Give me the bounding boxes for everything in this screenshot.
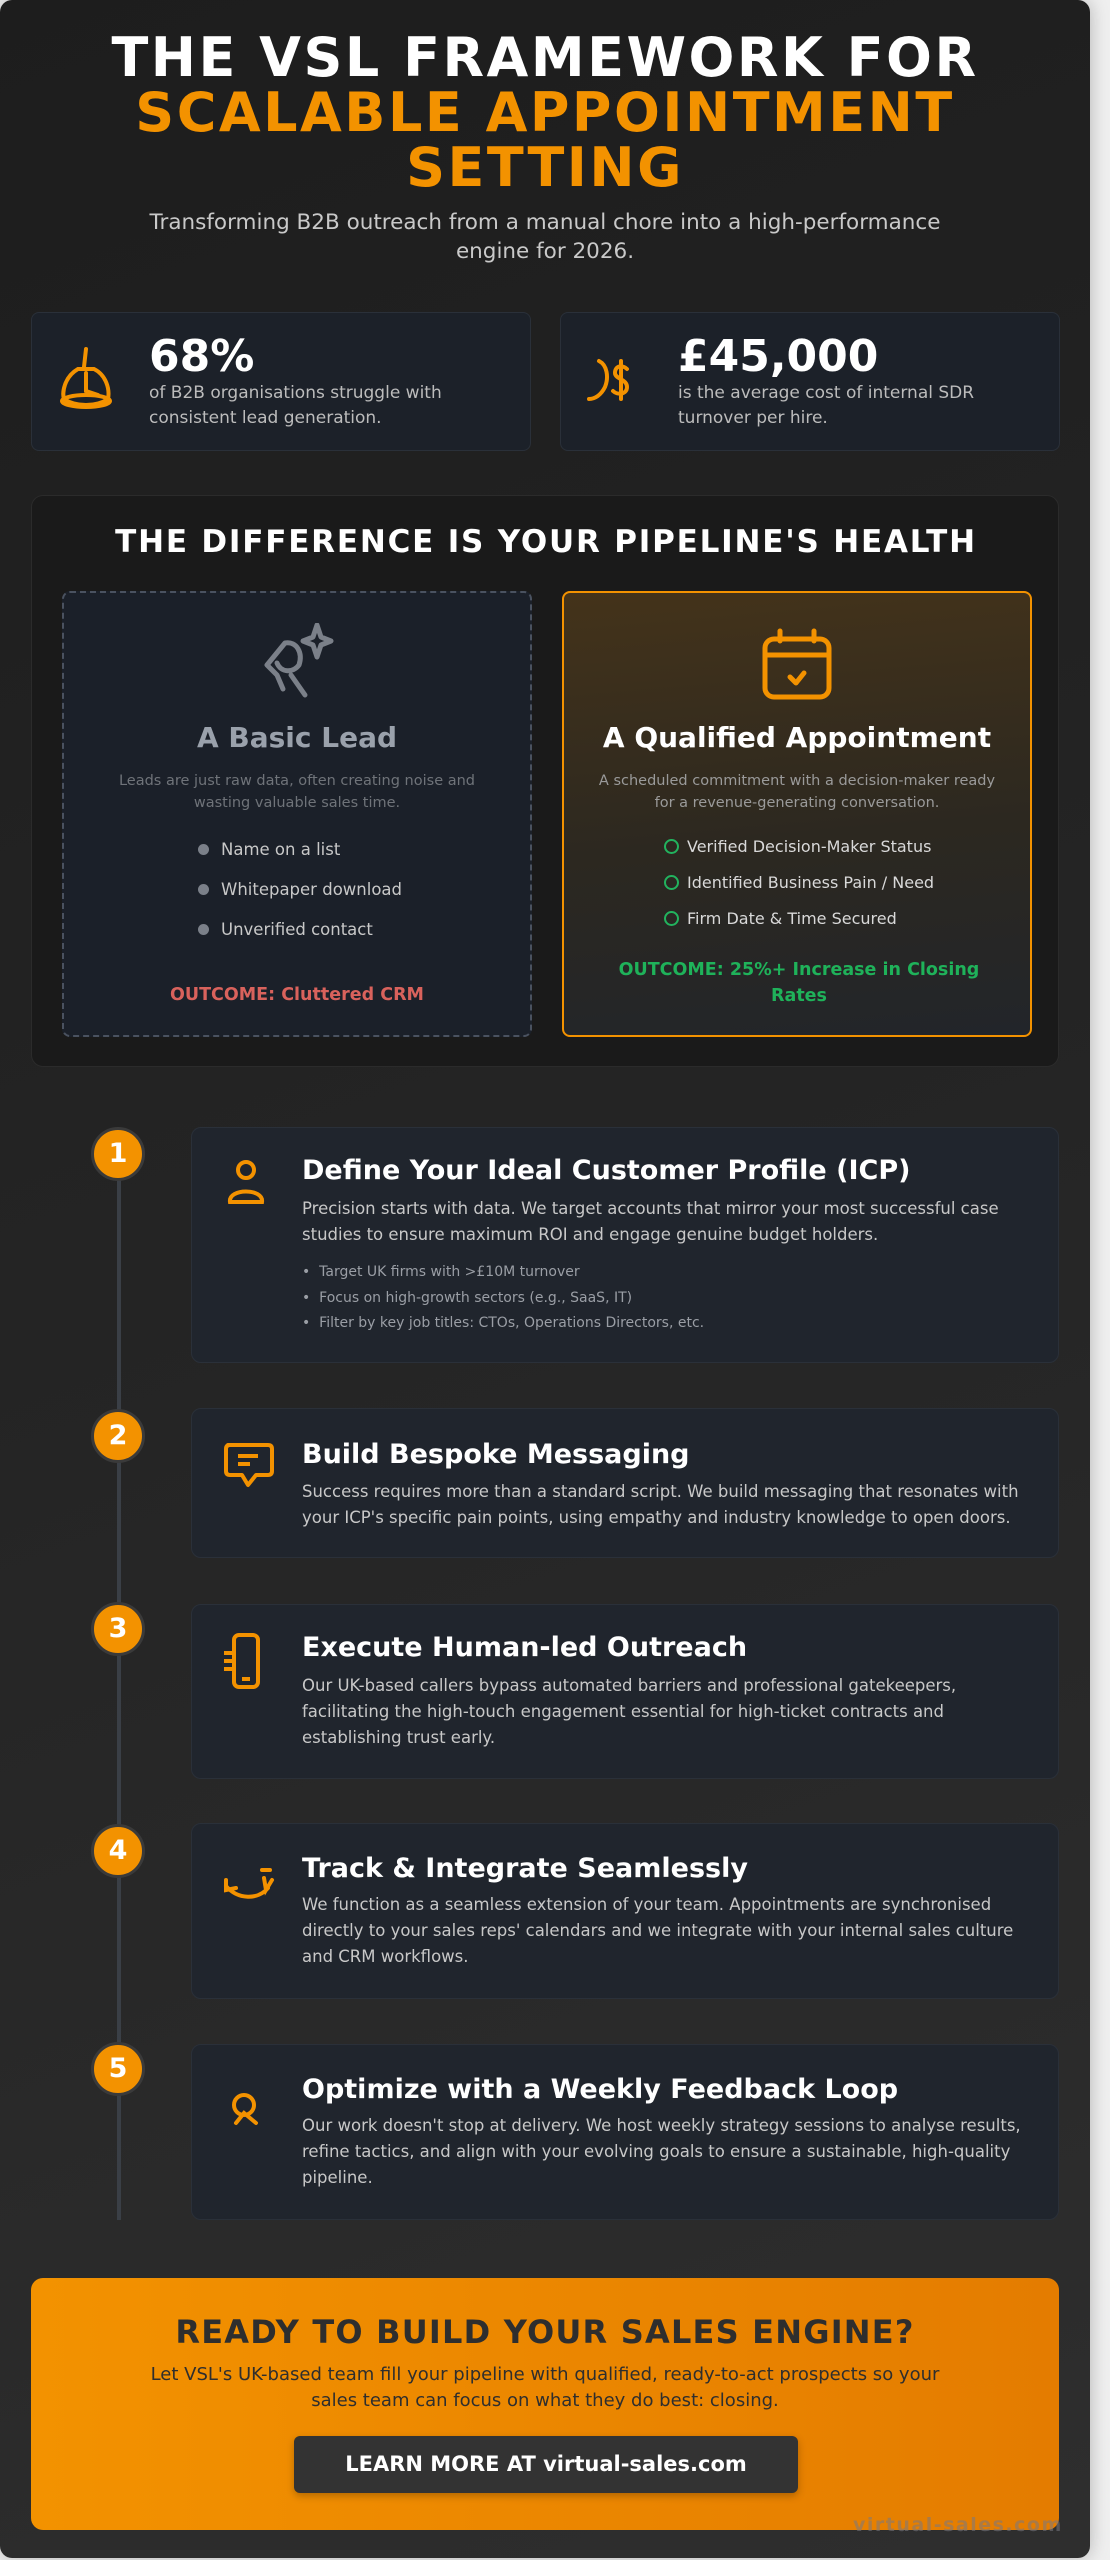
icon: search loop xyxy=(232,2093,258,2126)
stat text xyxy=(678,331,974,428)
bullets: • Target UK firms with >£10M turnover xyxy=(302,1264,580,1280)
stat card: 68% xyxy=(31,312,531,451)
step 3 number: 3 xyxy=(109,1613,127,1644)
stat text xyxy=(149,331,442,428)
stat text: is the average cost of internal SDR xyxy=(678,383,974,403)
box: qualified appointment xyxy=(562,591,1032,1037)
desc: Our work doesn't stop at delivery. We host weekly strategy sessions to analyse results, refine tactics, and align with your evolving goals to ensure a sustainable, high-quality pipeline. xyxy=(302,2116,1021,2187)
title: SCALABLE APPOINTMENT xyxy=(135,81,955,144)
step 4 number xyxy=(91,1824,145,1878)
CTA heading: READY TO BUILD YOUR SALES ENGINE? xyxy=(175,2313,915,2351)
panel heading: THE DIFFERENCE IS YOUR PIPELINE'S HEALTH xyxy=(115,524,977,560)
icon: sync xyxy=(224,1868,274,1899)
step 4 card xyxy=(191,1823,1059,1999)
title: Execute Human-led Outreach xyxy=(302,1632,747,1663)
stat text: turnover per hire. xyxy=(678,408,828,428)
checklist: Firm Date & Time Secured xyxy=(687,909,897,928)
stat text: of B2B organisations struggle with xyxy=(149,383,442,403)
desc: Success requires more than a standard script. We build messaging that resonates with your ICP's specific pain points, using empathy and industry knowledge to open doors. xyxy=(302,1482,1019,1527)
title: Build Bespoke Messaging xyxy=(302,1439,690,1470)
checklist xyxy=(664,837,934,928)
bullets: • Focus on high-growth sectors (e.g., SaaS, IT) xyxy=(302,1290,632,1306)
CTA button: LEARN MORE AT virtual-sales.com xyxy=(345,2452,747,2476)
list: Whitepaper download xyxy=(221,880,402,899)
desc: We function as a seamless extension of your team. Appointments are synchronised directly to your sales reps' calendars and we integrate with your internal sales culture and CRM workflows. xyxy=(302,1895,1013,1966)
stat text: consistent lead generation. xyxy=(149,408,382,428)
list: Name on a list xyxy=(221,840,340,859)
subtitle: Transforming B2B outreach from a manual chore into a high-performance engine for 2026. xyxy=(150,210,940,264)
box title: A Basic Lead xyxy=(197,721,397,754)
step 4 number: 4 xyxy=(109,1835,127,1866)
outcome: OUTCOME: Cluttered CRM xyxy=(170,985,424,1005)
step 2 number: 2 xyxy=(109,1420,127,1451)
step 3 number xyxy=(91,1602,145,1656)
title: Optimize with a Weekly Feedback Loop xyxy=(302,2074,898,2105)
title: THE VSL FRAMEWORK FOR xyxy=(111,26,979,89)
title: Define Your Ideal Customer Profile (ICP) xyxy=(302,1155,910,1186)
step 2 card xyxy=(191,1408,1059,1558)
step 3 card xyxy=(191,1604,1059,1779)
CTA text: Let VSL's UK-based team fill your pipeline with qualified, ready-to-act prospects so your sales team can focus on what they do best: closing. xyxy=(151,2364,939,2411)
step 1 card xyxy=(191,1127,1059,1363)
list xyxy=(198,840,402,939)
box desc: Leads are just raw data, often creating noise and wasting valuable sales time. xyxy=(119,773,475,811)
step 5 number: 5 xyxy=(109,2053,127,2084)
stat text: £45,000 xyxy=(678,331,878,382)
icon: user xyxy=(228,1160,264,1204)
outcome: OUTCOME: 25%+ Increase in Closing Rates xyxy=(619,960,979,1006)
step 1 number: 1 xyxy=(109,1138,127,1169)
step 5 number xyxy=(91,2042,145,2096)
desc: Precision starts with data. We target accounts that mirror your most successful case studies to ensure maximum ROI and engage genuine budget holders. xyxy=(302,1199,999,1244)
list: Unverified contact xyxy=(221,920,373,939)
step 1 number xyxy=(91,1127,145,1181)
stat text: 68% xyxy=(149,331,254,382)
bullets: • Filter by key job titles: CTOs, Operations Directors, etc. xyxy=(302,1315,704,1331)
icon: message xyxy=(224,1443,274,1488)
icon: calendar xyxy=(762,628,832,700)
step 2 number xyxy=(91,1409,145,1463)
bullets xyxy=(302,1264,704,1331)
icon: phone xyxy=(224,1633,260,1689)
checklist: Identified Business Pain / Need xyxy=(687,873,934,892)
CTA button xyxy=(294,2436,798,2493)
timeline line xyxy=(117,1160,121,2220)
desc: Our UK-based callers bypass automated barriers and professional gatekeepers, facilitating the high-touch engagement essential for high-ticket contracts and establishing trust early. xyxy=(302,1676,956,1747)
icon: sparkle lead xyxy=(264,623,334,698)
panel: difference xyxy=(31,495,1059,1067)
watermark: virtual-sales.com xyxy=(853,2514,1063,2536)
box desc: A scheduled commitment with a decision-maker ready for a revenue-generating conversation. xyxy=(599,773,995,811)
checklist: Verified Decision-Maker Status xyxy=(687,837,931,856)
CTA panel xyxy=(31,2278,1059,2530)
step 5 card xyxy=(191,2044,1059,2220)
icon: currency xyxy=(587,358,630,401)
title xyxy=(111,26,979,199)
icon: bell xyxy=(60,347,112,409)
title: Track & Integrate Seamlessly xyxy=(302,1853,748,1884)
box title: A Qualified Appointment xyxy=(603,721,991,754)
title: SETTING xyxy=(406,136,684,199)
stat card: £45,000 xyxy=(560,312,1060,451)
box: basic lead xyxy=(62,591,532,1037)
